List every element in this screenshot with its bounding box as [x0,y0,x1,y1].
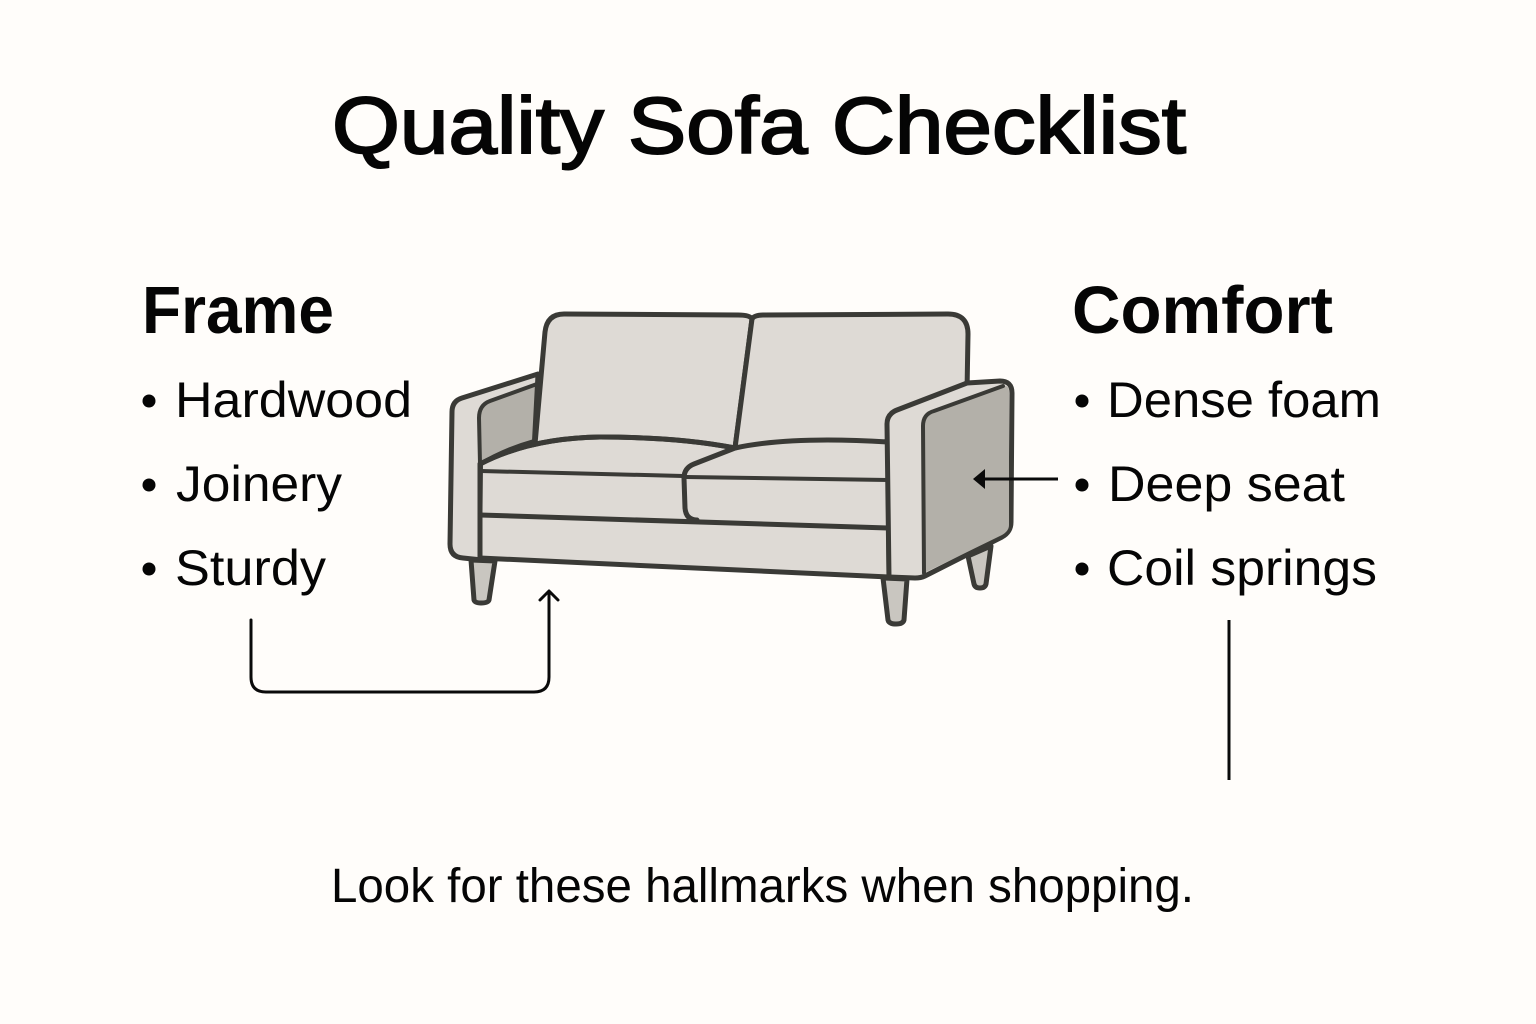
list item: deep seat: Deep seat [1108,456,1345,512]
panel: comfort [1072,273,1381,596]
list item: joinery: Joinery [176,456,342,512]
seat cushion lines [480,437,888,558]
sofa illustration [450,314,1012,624]
left arm [450,374,538,560]
title: Quality Sofa Checklist [332,81,1186,170]
panel: frame [142,273,412,596]
back cushion: left [535,314,752,448]
footer caption: Look for these hallmarks when shopping. [331,860,1194,913]
list item: sturdy: Sturdy [175,540,326,596]
list item: coil springs: Coil springs [1107,540,1377,596]
list item: hardwood: Hardwood [175,372,412,428]
left arm inner panel [479,384,537,464]
seat cushion right edge [684,448,735,520]
sofa leg: back right [968,546,991,588]
right arm side panel [923,386,1009,573]
heading: frame: Frame [142,273,334,348]
heading: comfort: Comfort [1072,273,1333,348]
sofa leg: front right [883,578,907,624]
list item: dense foam: Dense foam [1107,372,1381,428]
base rail [480,515,888,528]
back cushion: right [735,314,968,448]
sofa leg: front left [471,560,495,603]
left front post [480,464,481,558]
sofa base and seat front [480,437,889,577]
right arm [887,381,1012,578]
arrow: deep seat to sofa arm [973,469,1058,489]
vertical connector line [1228,620,1230,780]
arrow: frame to sofa base [251,591,558,692]
seat cushion left edge [480,437,735,464]
seat piping [481,471,888,480]
